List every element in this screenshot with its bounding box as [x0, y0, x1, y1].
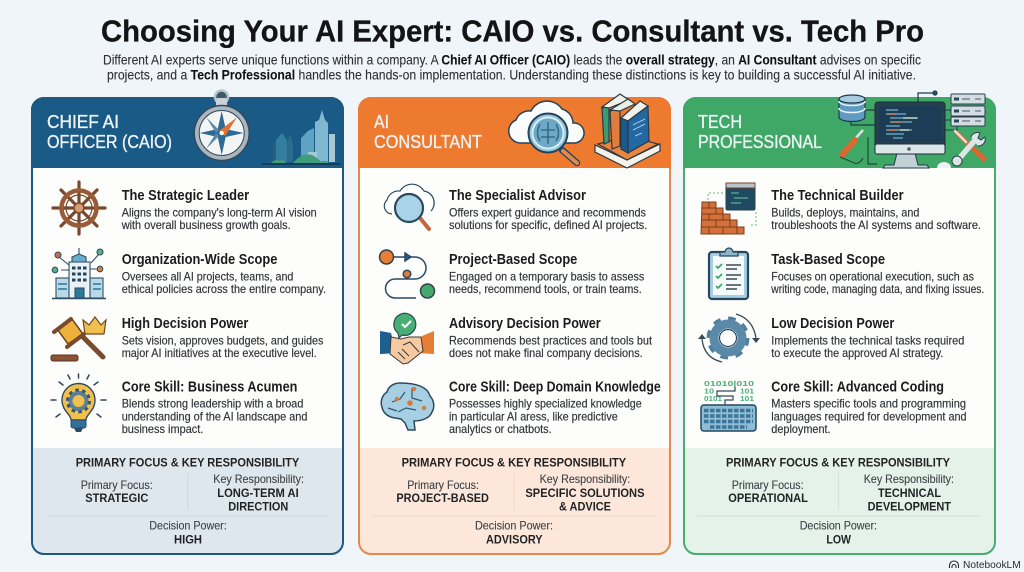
item: technical builder: troubleshoots the AI systems and software.: [771, 218, 981, 232]
summary: tech primary focus and responsibility: Decision Power:: [800, 518, 877, 532]
summary: tech primary focus and responsibility: LOW: [826, 532, 851, 546]
item: low decision power: Implements the technical tasks required: [771, 334, 964, 348]
item: strategic leader: [53, 182, 317, 234]
item: core skill domain knowledge: analytics or chatbots.: [449, 422, 552, 436]
item: core skill business acumen: [51, 374, 307, 436]
summary: consultant primary focus and responsibility: ADVISORY: [486, 532, 543, 546]
icon: computer monitor with code: [875, 102, 957, 168]
item: core skill business acumen: Blends strong leadership with a broad: [122, 396, 303, 410]
summary: consultant primary focus and responsibility: Decision Power:: [475, 518, 553, 532]
intro text: Different AI experts serve unique functions within a company. A Chief AI Officer (CAIO) leads the overall strategy, an AI Consultant advises on specific: [103, 52, 921, 68]
icon: clipboard checklist: [709, 248, 748, 299]
item: low decision power: [698, 314, 964, 362]
summary: consultant primary focus and responsibility: PROJECT-BASED: [396, 491, 489, 505]
item: strategic leader: The Strategic Leader: [122, 188, 249, 204]
item: task-based scope: [709, 248, 984, 299]
item: advisory decision power: Recommends best practices and tools but: [449, 334, 653, 348]
item: task-based scope: Focuses on operational execution, such as: [771, 270, 974, 284]
icon: binary and keyboard: 101: [740, 388, 754, 396]
icon: cloud and magnifier: [509, 101, 584, 163]
summary: CAIO primary focus and responsibility: DIRECTION: [228, 500, 288, 514]
item: high decision power: major AI initiatives at the executive level.: [122, 346, 317, 360]
item: project-based scope: Project-Based Scope: [449, 252, 577, 268]
item: strategic leader: with overall business growth goals.: [121, 218, 291, 232]
item: project-based scope: needs, recommend tools, or train teams.: [449, 282, 642, 296]
item: specialist advisor: Offers expert guidance and recommends: [449, 206, 646, 220]
item: technical builder: Builds, deploys, maintains, and: [771, 206, 919, 220]
summary: consultant primary focus and responsibility: SPECIFIC SOLUTIONS: [525, 486, 644, 500]
item: specialist advisor: solutions for specific, defined AI projects.: [449, 218, 647, 232]
icon: compass: [194, 90, 249, 160]
item: core skill domain knowledge: Possesses highly specialized knowledge: [449, 396, 642, 410]
item: core skill domain knowledge: in particular AI aress, like predictive: [449, 410, 618, 424]
item: advisory decision power: Advisory Decision Power: [449, 316, 601, 332]
summary: tech primary focus and responsibility: [696, 456, 980, 546]
item: organization-wide scope: Organization-Wide Scope: [122, 252, 277, 268]
summary: CAIO primary focus and responsibility: PRIMARY FOCUS & KEY RESPONSIBILITY: [76, 456, 299, 470]
panel: chief AI officer: [32, 90, 343, 554]
item: advisory decision power: does not make final company decisions.: [449, 346, 643, 360]
icon: server racks: [951, 94, 985, 126]
summary: consultant primary focus and responsibility: Key Responsibility:: [540, 472, 630, 486]
icon: binary and keyboard: [701, 381, 756, 431]
summary: CAIO primary focus and responsibility: Key Responsibility:: [213, 472, 304, 486]
icon: binary and keyboard: 101: [740, 396, 754, 403]
header title: CAIO: [47, 111, 172, 152]
icon: gear with arrows: [698, 314, 760, 362]
icon: binary and keyboard: 10: [704, 388, 714, 396]
icon: light bulb with gear: [51, 374, 106, 432]
summary: CAIO primary focus and responsibility: HIGH: [174, 532, 202, 546]
intro text: [103, 52, 921, 82]
icon: wrench and screwdriver: [937, 131, 985, 168]
item: core skill business acumen: business impact.: [122, 422, 203, 436]
summary: consultant primary focus and responsibility: & ADVICE: [559, 500, 611, 514]
icon: cloud with magnifier: [384, 184, 434, 229]
item: high decision power: High Decision Power: [122, 316, 249, 332]
item: high decision power: Sets vision, approves budgets, and guides: [122, 334, 323, 348]
header title: CAIO: CHIEF AI: [47, 111, 119, 132]
title: Choosing Your AI Expert: CAIO vs. Consultant vs. Tech Pro: [101, 14, 924, 48]
icon: brick wall with code window: [701, 183, 756, 234]
header title: tech professional: TECH: [698, 111, 742, 132]
icon: ship wheel: [53, 182, 105, 234]
item: core skill advanced coding: deployment.: [771, 422, 831, 436]
icon: office building with nodes: [52, 248, 106, 298]
summary: CAIO primary focus and responsibility: Decision Power:: [149, 518, 227, 532]
item: core skill advanced coding: languages required for development and: [771, 410, 967, 424]
icon: stack of books: [595, 94, 660, 168]
item: task-based scope: writing code, managing data, and fixing issues.: [770, 282, 984, 296]
summary: CAIO primary focus and responsibility: [48, 456, 328, 546]
summary: tech primary focus and responsibility: Key Responsibility:: [864, 472, 954, 486]
NotebookLM badge: NotebookLM: [963, 559, 1021, 571]
header title: CAIO: OFFICER (CAIO): [47, 131, 172, 152]
summary: tech primary focus and responsibility: TECHNICAL: [878, 486, 941, 500]
item: core skill advanced coding: [701, 380, 967, 436]
icon: gavel and crown: [51, 317, 106, 361]
item: technical builder: The Technical Builder: [771, 188, 904, 204]
summary: tech primary focus and responsibility: Primary Focus:: [732, 478, 804, 492]
item: project-based scope: [380, 250, 644, 298]
header title: consultant: CONSULTANT: [374, 131, 482, 152]
item: core skill domain knowledge: Core Skill: Deep Domain Knowledge: [449, 380, 661, 396]
icon: handshake with check: [380, 313, 434, 364]
header title: tech professional: PROFESSIONAL: [698, 131, 822, 152]
item: organization-wide scope: ethical policies across the entire company.: [122, 282, 326, 296]
icon: process path: [380, 250, 434, 298]
icon: binary and keyboard: 01010|010: [704, 381, 754, 388]
item: technical builder: [701, 183, 981, 234]
header title: tech professional: [698, 111, 822, 152]
item: project-based scope: Engaged on a temporary basis to assess: [449, 270, 644, 284]
item: core skill advanced coding: Masters specific tools and programming: [771, 396, 966, 410]
item: task-based scope: Task-Based Scope: [771, 252, 885, 268]
summary: CAIO primary focus and responsibility: Primary Focus:: [81, 478, 153, 492]
summary: consultant primary focus and responsibility: PRIMARY FOCUS & KEY RESPONSIBILITY: [402, 456, 626, 470]
summary: CAIO primary focus and responsibility: STRATEGIC: [85, 491, 148, 505]
item: core skill domain knowledge: [381, 380, 661, 436]
header title: consultant: AI: [374, 111, 389, 132]
item: core skill business acumen: understanding of the AI landscape and: [122, 410, 307, 424]
icon: city skyline: [262, 110, 340, 164]
summary: tech primary focus and responsibility: OPERATIONAL: [728, 491, 808, 505]
header title: consultant: [374, 111, 482, 152]
intro text: projects, and a Tech Professional handles the hands-on implementation. Understanding these distinctions is key to building a successful AI initiative.: [107, 68, 916, 82]
summary: CAIO primary focus and responsibility: LONG-TERM AI: [217, 486, 299, 500]
icon: circuit brain: [381, 383, 434, 430]
summary: consultant primary focus and responsibility: [372, 456, 656, 546]
item: strategic leader: Aligns the company's long-term AI vision: [122, 206, 317, 220]
item: organization-wide scope: [52, 248, 326, 298]
item: specialist advisor: The Specialist Advisor: [449, 188, 586, 204]
item: advisory decision power: [380, 313, 653, 364]
item: core skill business acumen: Core Skill: Business Acumen: [122, 380, 297, 396]
panel: AI consultant: [359, 94, 670, 554]
summary: tech primary focus and responsibility: PRIMARY FOCUS & KEY RESPONSIBILITY: [726, 456, 950, 470]
panel: tech professional: [684, 91, 995, 554]
item: organization-wide scope: Oversees all AI projects, teams, and: [122, 270, 293, 284]
summary: consultant primary focus and responsibility: Primary Focus:: [407, 478, 479, 492]
summary: tech primary focus and responsibility: DEVELOPMENT: [868, 500, 951, 514]
item: low decision power: to execute the approved AI strategy.: [771, 346, 943, 360]
icon: database: [839, 91, 937, 125]
icon: screwdriver: [840, 130, 877, 164]
icon: binary and keyboard: 0101: [704, 396, 722, 403]
item: low decision power: Low Decision Power: [771, 316, 895, 332]
item: high decision power: [51, 316, 323, 361]
item: core skill advanced coding: Core Skill: Advanced Coding: [771, 380, 944, 396]
item: specialist advisor: [384, 184, 647, 232]
